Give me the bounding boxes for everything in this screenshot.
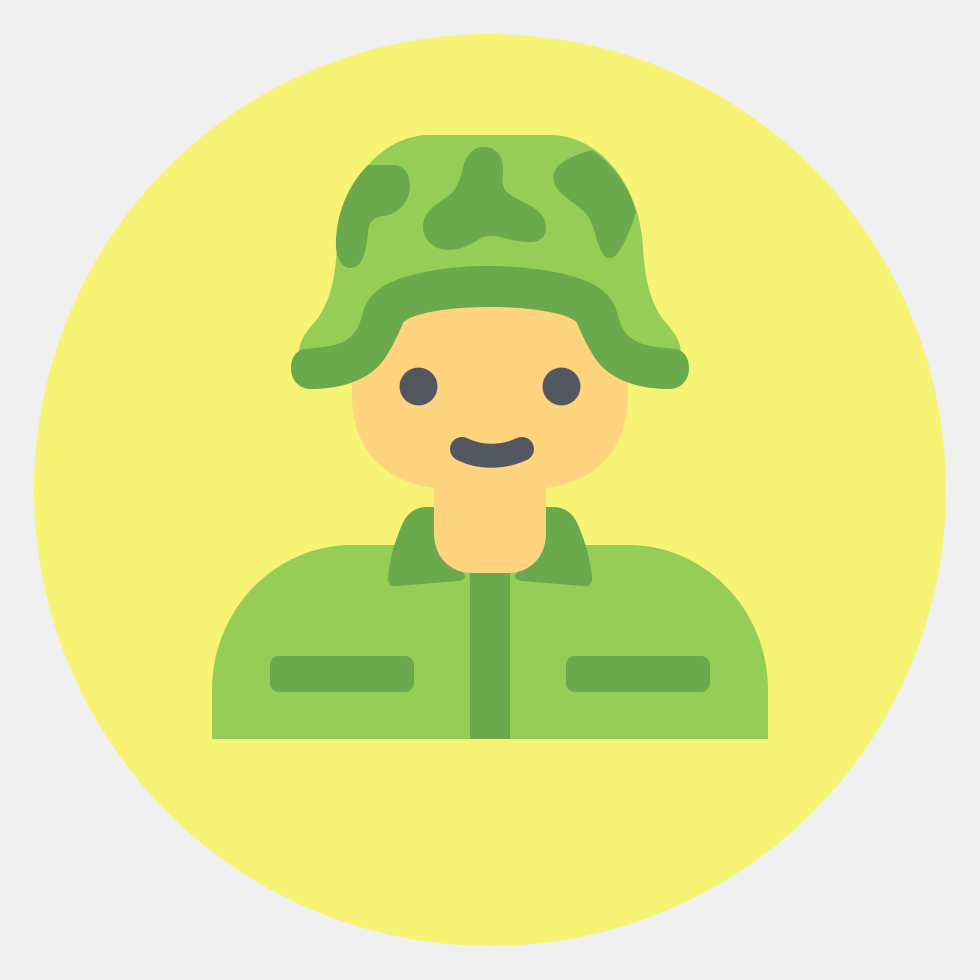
helmet brim <box>291 266 689 389</box>
left pocket <box>270 656 414 692</box>
face <box>352 300 628 488</box>
helmet dome <box>299 135 681 365</box>
right pocket <box>566 656 710 692</box>
left eye <box>400 368 438 406</box>
left camo patch <box>336 165 410 268</box>
mouth <box>462 449 522 456</box>
right eye <box>542 368 580 406</box>
icon: camouflage helmet <box>291 135 689 389</box>
neck <box>434 470 546 573</box>
icon: head and neck <box>352 300 628 573</box>
right camo patch <box>553 150 636 258</box>
left collar <box>388 507 465 586</box>
icon: soldier body <box>212 507 768 739</box>
jacket <box>212 545 768 739</box>
right collar <box>515 507 592 586</box>
jacket placket <box>470 570 510 739</box>
center camo patch <box>423 147 546 250</box>
